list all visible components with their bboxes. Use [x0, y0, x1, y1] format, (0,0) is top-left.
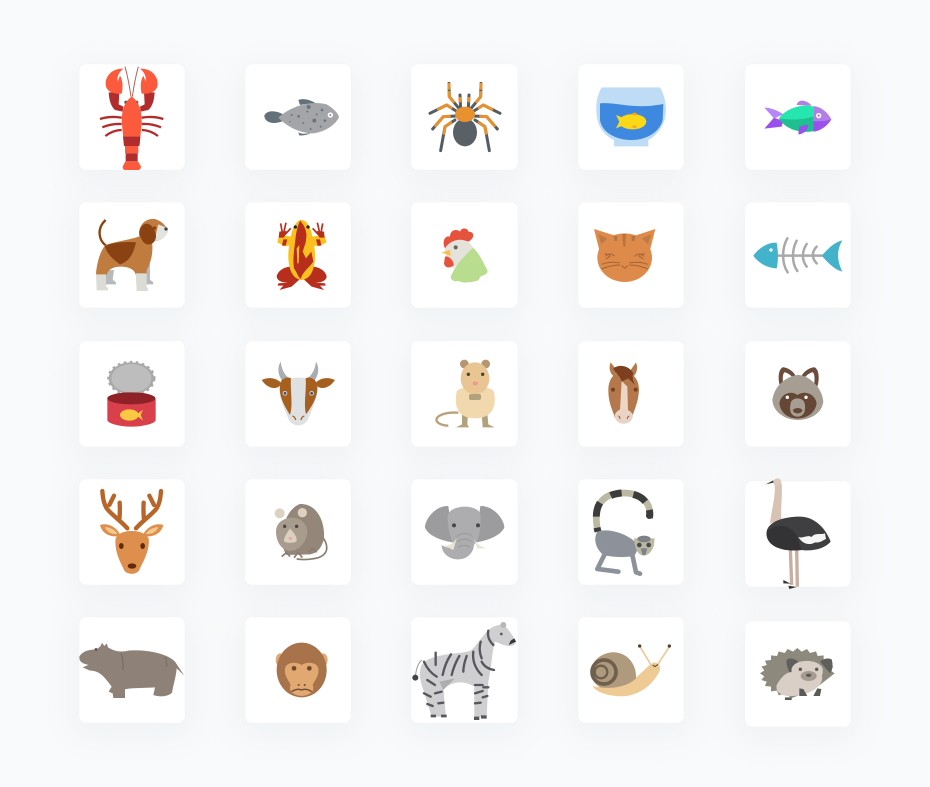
panel: beagle card [79, 202, 185, 308]
icon: fish skeleton [753, 238, 842, 272]
icon: elephant head [425, 506, 504, 559]
panel: cow card [245, 341, 351, 447]
icon: rooster [442, 229, 488, 283]
icon: ring-tailed lemur [595, 493, 655, 574]
panel: monkey card [245, 617, 351, 723]
panel: flatfish card [245, 64, 351, 170]
panel: horse card [578, 341, 684, 447]
icon: lobster [100, 67, 163, 170]
icon: monkey face [276, 643, 328, 697]
panel: frog card [245, 202, 351, 308]
panel: colorful fish card [745, 64, 851, 170]
panel: tin can card [79, 341, 185, 447]
icon: cat face [594, 229, 655, 282]
icon: colorful fish [764, 101, 831, 134]
panel: elephant card [411, 479, 518, 585]
panel: lobster card [79, 64, 185, 170]
panel: rooster card [411, 202, 518, 308]
icon: tarantula [430, 83, 500, 151]
panel: hedgehog card [745, 621, 851, 727]
panel: deer card [79, 479, 185, 585]
icon: hippo [79, 643, 184, 698]
icon: zebra [412, 622, 516, 720]
panel: fishbowl card [578, 64, 684, 170]
panel: hippo card [79, 617, 185, 723]
icon: fish tin can [107, 362, 156, 427]
icon: poison frog [277, 220, 327, 290]
icon: raccoon face [772, 367, 823, 420]
icon: horse head [608, 362, 639, 424]
icon: beagle dog [96, 219, 168, 291]
icon: snail [591, 644, 671, 696]
icon: cow head [262, 362, 335, 425]
icon: deer head [100, 491, 163, 574]
panel: snail card [578, 617, 684, 723]
icon: rat [275, 504, 327, 559]
icon: fishbowl [596, 87, 666, 146]
icon: hedgehog [760, 648, 835, 700]
panel: gerbil card [411, 341, 518, 447]
panel: zebra card [411, 617, 518, 723]
panel: tarantula card [411, 64, 518, 170]
panel: cat card [578, 202, 684, 308]
panel: fish skeleton card [745, 202, 851, 308]
icon: ostrich [766, 478, 831, 589]
panel: ostrich card [745, 478, 851, 589]
icon: flatfish [264, 99, 339, 136]
panel: rat card [245, 479, 351, 585]
panel: lemur card [578, 479, 684, 585]
icon: gerbil [436, 360, 495, 427]
panel: raccoon card [745, 341, 851, 447]
